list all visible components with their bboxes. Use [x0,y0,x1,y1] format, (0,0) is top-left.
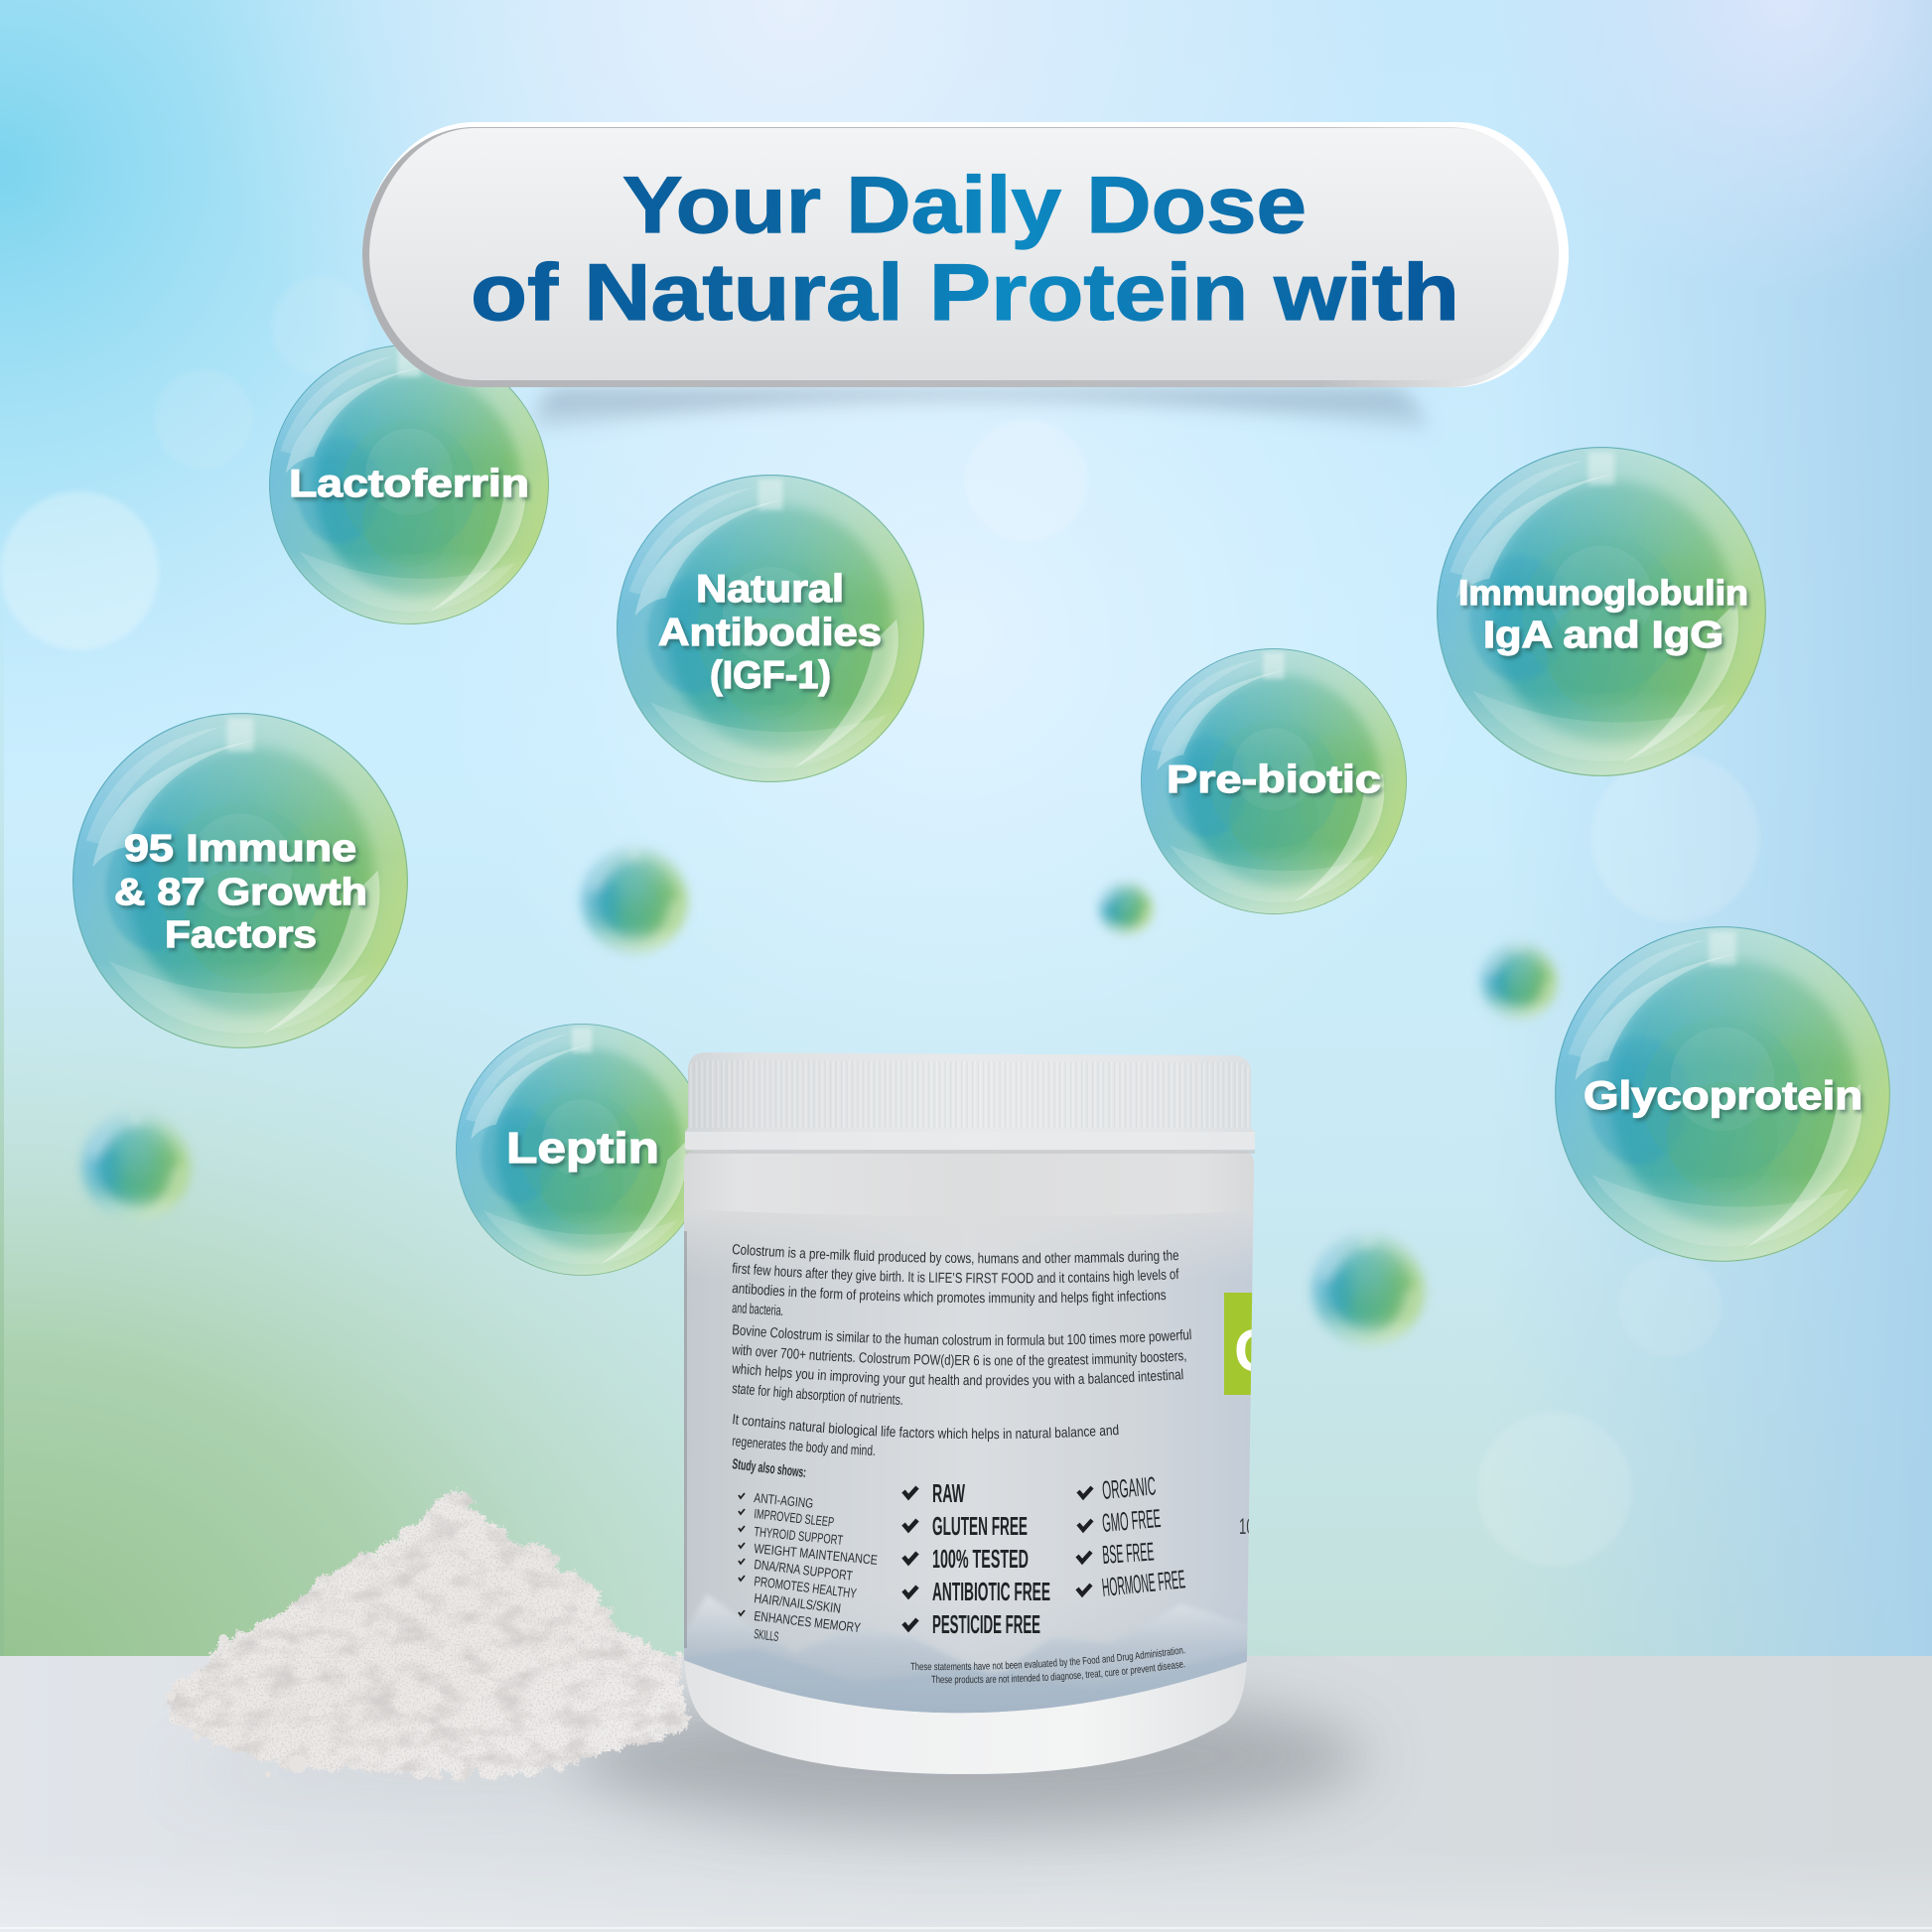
jar [684,1052,1255,1774]
label: Natural Antibodies (IGF-1): Antibodies [658,612,882,654]
label: Natural Antibodies (IGF-1): (IGF-1) [710,654,831,697]
jar label: FDA disclaimer: These products are not intended to diagnose, treat, cure or prevent disease. [931,1662,1185,1686]
label: Natural Antibodies (IGF-1): Natural [696,568,844,611]
jar label paragraph text: with over 700+ nutrients. Colostrum POW(d)ER 6 is one of the greatest immunity boosters, [733,1344,1185,1368]
jar label: study benefits list: THYROID SUPPORT [754,1524,844,1548]
jar label: quality claims column one: ANTIBIOTIC FREE [932,1577,1050,1606]
bubble: 95 Immune and 87 Growth Factors [72,713,408,1048]
label: 95 Immune and 87 Growth Factors: & 87 Growth [114,872,367,913]
jar label paragraph text: antibodies in the form of proteins which promotes immunity and helps fight infections [733,1283,1166,1307]
bubble: Glycoprotein [1555,926,1890,1262]
check marks [903,1487,917,1629]
label: Lactoferrin: Lactoferrin [289,463,529,505]
side nutrition panel edge [684,1231,687,1648]
jar label paragraph text: Study also shows: [733,1458,806,1477]
jar label paragraph text: state for high absorption of nutrients. [733,1384,902,1405]
jar label: quality claims column one [903,1478,1050,1639]
jar label: study benefits list: DNA/RNA SUPPORT [754,1557,854,1584]
jar label: quality claims column two: BSE FREE [1101,1536,1155,1570]
green label tag [1224,1293,1253,1395]
bubble: Natural Antibodies (IGF-1) [617,475,924,782]
jar label paragraph text: and bacteria. [733,1303,782,1315]
label: Immunoglobulin IgA and IgG: IgA and IgG [1483,615,1724,656]
jar label: FDA disclaimer [910,1647,1185,1686]
jar label paragraph text: regenerates the body and mind. [733,1438,875,1455]
jar label: study benefits list: WEIGHT MAINTENANCE [754,1541,879,1568]
small check marks [739,1493,745,1615]
jar label paragraph text: It contains natural biological life factors which helps in natural balance and [733,1414,1119,1442]
label: 95 Immune and 87 Growth Factors [114,828,367,956]
label: Leptin: Leptin [506,1124,659,1173]
jar label: study benefits list: IMPROVED SLEEP [754,1506,835,1530]
jar label background [681,1206,1277,1727]
jar label: quality claims column two: ORGANIC [1101,1470,1157,1505]
jar label paragraph text: which helps you in improving your gut health and provides you with a balanced intestinal [733,1363,1183,1388]
label: Immunoglobulin IgA and IgG [1458,574,1748,656]
powder pile [166,1490,695,1777]
blurred small bubble [1099,882,1153,935]
jar label: study benefits list: ANTI-AGING [754,1490,814,1511]
bubble: Immunoglobulin IgA and IgG [1437,447,1766,776]
powder crumbs [166,1634,307,1777]
jar label: study benefits list: HAIR/NAILS/SKIN [754,1590,842,1616]
jar label: study benefits list: PROMOTES HEALTHY [754,1574,858,1601]
jar lid [685,1052,1255,1154]
jar label: FDA disclaimer: These statements have not been evaluated by the Food and Drug Administration. [910,1647,1185,1670]
background: soft bokeh circles [0,277,1760,1567]
bubble: Pre-biotic [1141,648,1407,914]
floor [0,1656,1932,1932]
blurred small bubble [582,848,687,953]
jar label paragraph text: first few hours after they give birth. It is LIFE’S FIRST FOOD and it contains high levels of [733,1263,1179,1285]
jar label: quality claims column two [1077,1470,1186,1602]
jar: HORMONE FREE [1100,1564,1186,1602]
jar label: quality claims column two: GMO FREE [1101,1503,1162,1538]
jar label paragraph text: Colostrum is a pre-milk fluid produced by cows, humans and other mammals during the [733,1244,1179,1266]
title text: Your Daily Dose [622,161,1307,250]
blurred small bubble [1481,943,1557,1019]
label: 95 Immune and 87 Growth Factors: Factors [165,914,317,956]
label: 95 Immune and 87 Growth Factors: 95 Immune [124,828,356,870]
jar label: study benefits list: ENHANCES MEMORY [754,1608,862,1635]
jar label paragraph text: Bovine Colostrum is similar to the human colostrum in formula but 100 times more powerful [733,1324,1191,1345]
jar label: study benefits list [739,1490,879,1644]
jar label background: 100 [1239,1514,1261,1539]
jar label: quality claims column one: RAW [932,1478,965,1508]
blurred small bubble [1312,1234,1424,1345]
jar label: quality claims column one: 100% TESTED [932,1544,1029,1574]
label: Glycoprotein: Glycoprotein [1584,1074,1863,1118]
jar label: study benefits list: SKILLS [754,1626,779,1644]
title pill [362,122,1569,387]
bubble: Leptin [456,1024,708,1276]
label: Immunoglobulin IgA and IgG: Immunoglobulin [1458,574,1748,613]
jar label paragraph text [733,1244,1191,1477]
title text: of Natural Protein with [471,248,1459,338]
jar label background: C [1234,1317,1277,1384]
blurred small bubble [82,1113,190,1220]
bubble: Lactoferrin [269,345,549,624]
jar body [684,1151,1254,1774]
label: Pre-biotic: Pre-biotic [1167,759,1381,801]
jar label: quality claims column one: GLUTEN FREE [932,1511,1028,1541]
title text [471,161,1459,338]
title pill shadow [535,389,1430,432]
check marks [1077,1487,1092,1594]
label: Natural Antibodies (IGF-1) [658,568,882,697]
jar label: quality claims column one: PESTICIDE FREE [932,1609,1040,1639]
jar and powder shadow [179,1688,1365,1827]
